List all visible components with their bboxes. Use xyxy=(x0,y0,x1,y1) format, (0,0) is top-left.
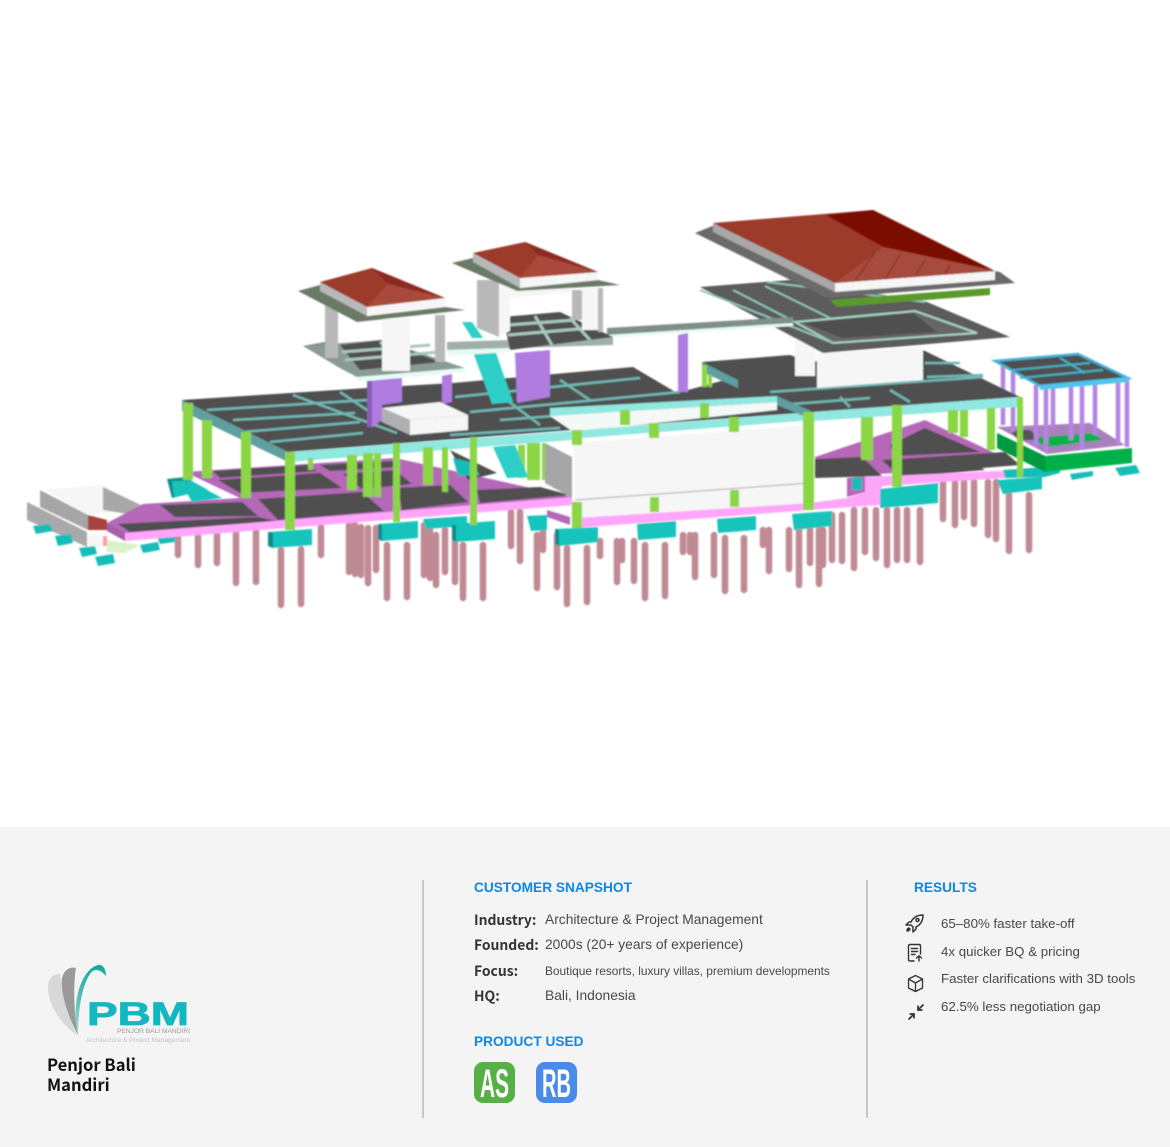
upper right slab xyxy=(702,355,860,388)
snapshot rows: HQ: xyxy=(474,986,500,1006)
ground slab: left wing xyxy=(107,450,572,541)
heading: results: RESULTS xyxy=(914,880,977,895)
icon: 3D cube xyxy=(908,974,924,992)
snapshot rows: Boutique resorts, luxury villas, premium developments xyxy=(545,964,830,978)
icon: compress arrows xyxy=(908,1004,924,1020)
first floor slab xyxy=(182,350,1020,462)
snapshot rows: Industry: xyxy=(474,910,536,930)
result: take-off: 65–80% faster take-off xyxy=(941,916,1075,931)
left pavilion xyxy=(298,268,465,382)
icon: PBM company logo: PENJOR BALI MANDIRI xyxy=(117,1028,190,1035)
snapshot rows: Focus: xyxy=(474,961,518,981)
central stair box xyxy=(382,402,468,435)
panel: building model hero xyxy=(0,0,1170,827)
piles xyxy=(178,482,1029,605)
columns green xyxy=(183,397,1023,530)
icon: document upload xyxy=(908,944,922,962)
long walkway beam xyxy=(607,317,793,338)
white central wall box xyxy=(545,425,810,518)
large roof mezzanine plate xyxy=(700,280,1010,353)
purple walls xyxy=(367,333,688,427)
snapshot rows: Architecture & Project Management xyxy=(545,912,763,927)
panel: footer information band xyxy=(0,827,1170,1147)
icon: PBM company logo: PBM xyxy=(87,996,189,1032)
icon: PBM company logo xyxy=(48,964,190,1044)
snapshot rows: Founded: xyxy=(474,935,539,955)
middle pavilion xyxy=(447,242,620,356)
company name: Penjor Bali xyxy=(47,1052,136,1076)
left retaining wall xyxy=(27,485,167,553)
large roof xyxy=(695,210,1015,307)
snapshot rows: Bali, Indonesia xyxy=(545,988,636,1003)
company name: Mandiri xyxy=(47,1072,110,1096)
heading: product used: PRODUCT USED xyxy=(474,1034,584,1049)
snapshot rows: 2000s (20+ years of experience) xyxy=(545,937,743,952)
icon: rocket xyxy=(905,914,924,933)
lower stair flight xyxy=(493,445,528,478)
chart: 3D structural BIM model xyxy=(26,208,1141,609)
right annex green base and frame xyxy=(995,353,1140,480)
company name xyxy=(47,1052,136,1096)
heading: customer snapshot: CUSTOMER SNAPSHOT xyxy=(474,880,632,895)
small footings xyxy=(33,524,175,566)
divider right xyxy=(866,880,868,1118)
pile caps xyxy=(167,477,1042,548)
icon: PBM company logo: Architecture & Project Management xyxy=(86,1037,190,1044)
divider left xyxy=(422,880,424,1118)
result: clarifications: Faster clarifications with 3D tools xyxy=(941,971,1135,986)
white columns under large roof xyxy=(793,287,923,388)
result: negotiation gap: 62.5% less negotiation gap xyxy=(941,999,1101,1014)
upper stair flights xyxy=(462,322,513,404)
result: BQ: 4x quicker BQ & pricing xyxy=(941,944,1080,959)
ground slab: right wing xyxy=(575,420,1020,528)
